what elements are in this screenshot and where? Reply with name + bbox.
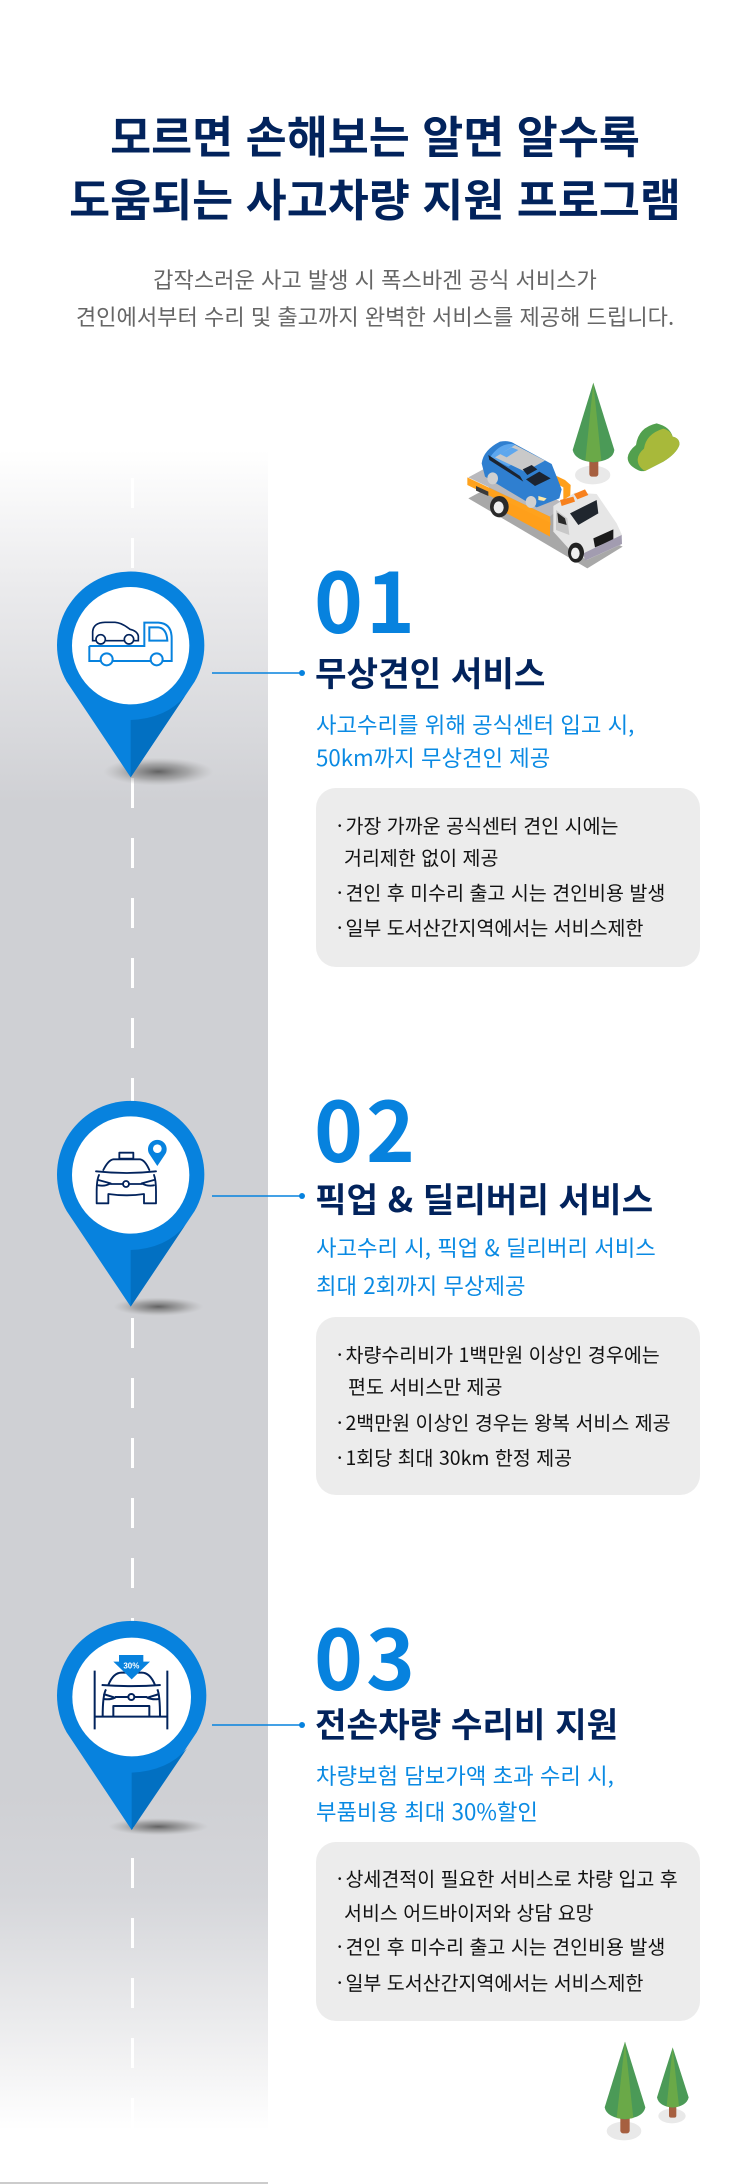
heading 01: 무상견인 서비스 (315, 646, 545, 696)
details box 03: ·상세견적이 필요한 서비스로 차량 입고 후 (337, 1863, 678, 1892)
heading 03: 전손차량 수리비 지원 (315, 1697, 618, 1747)
connector line 1 (212, 670, 305, 676)
icon: map pin with taxi (57, 1100, 204, 1315)
details box 02: ·1회당 최대 30km 한정 제공 (337, 1442, 572, 1471)
subtitle: 갑작스러운 사고 발생 시 폭스바겐 공식 서비스가 (153, 263, 597, 295)
description 02: 사고수리 시, 픽업 & 딜리버리 서비스 (316, 1231, 656, 1263)
subtitle: 견인에서부터 수리 및 출고까지 완벽한 서비스를 제공해 드립니다. (76, 300, 674, 332)
details box 01: ·일부 도서산간지역에서는 서비스제한 (337, 912, 643, 941)
details box 01: 거리제한 없이 제공 (344, 842, 498, 871)
description 03 (316, 1759, 614, 1827)
details box 03 (316, 1842, 700, 2021)
details box 01: ·견인 후 미수리 출고 시는 견인비용 발생 (337, 877, 665, 906)
details box 02: 편도 서비스만 제공 (348, 1371, 502, 1400)
section 02: pickup and delivery (314, 1066, 700, 1495)
road background panel (0, 450, 268, 2130)
title (69, 101, 681, 229)
number 03: 03 (314, 1594, 418, 1714)
details box 01: ·가장 가까운 공식센터 견인 시에는 (337, 810, 618, 839)
description 03: 부품비용 최대 30%할인 (316, 1795, 538, 1827)
icon: map pin with 30% discount car: 30% (123, 1662, 139, 1671)
details box 01 (316, 788, 700, 967)
details box 02: ·차량수리비가 1백만원 이상인 경우에는 (337, 1339, 660, 1368)
description 03: 차량보험 담보가액 초과 수리 시, (316, 1759, 614, 1791)
icon: two trees (604, 2042, 689, 2140)
connector line 2 (212, 1193, 305, 1199)
subtitle (76, 263, 674, 332)
connector line 3 (212, 1722, 305, 1728)
title: 도움되는 사고차량 지원 프로그램 (69, 164, 681, 229)
icon: tow truck illustration with tree and bush (467, 382, 680, 568)
number 01: 01 (314, 537, 418, 657)
details box 02: ·2백만원 이상인 경우는 왕복 서비스 제공 (337, 1407, 671, 1436)
number 02: 02 (314, 1066, 418, 1186)
details box 02 (316, 1317, 700, 1495)
description 01: 50km까지 무상견인 제공 (316, 741, 550, 773)
details box 03: 서비스 어드바이저와 상담 요망 (344, 1897, 594, 1926)
description 02 (316, 1231, 656, 1301)
description 01: 사고수리를 위해 공식센터 입고 시, (316, 708, 634, 740)
title: 모르면 손해보는 알면 알수록 (110, 101, 640, 166)
details box 03: ·견인 후 미수리 출고 시는 견인비용 발생 (337, 1931, 665, 1960)
icon: map pin with tow truck (57, 572, 207, 784)
description 02: 최대 2회까지 무상제공 (316, 1269, 525, 1301)
icon: map pin with 30% discount car (57, 1620, 206, 1834)
section 01: free towing (314, 537, 700, 967)
section 03: total-loss repair support (314, 1594, 700, 2021)
description 01 (316, 708, 634, 773)
heading 02: 픽업 & 딜리버리 서비스 (315, 1172, 653, 1222)
road bottom edge line (0, 2182, 268, 2184)
details box 03: ·일부 도서산간지역에서는 서비스제한 (337, 1967, 643, 1996)
